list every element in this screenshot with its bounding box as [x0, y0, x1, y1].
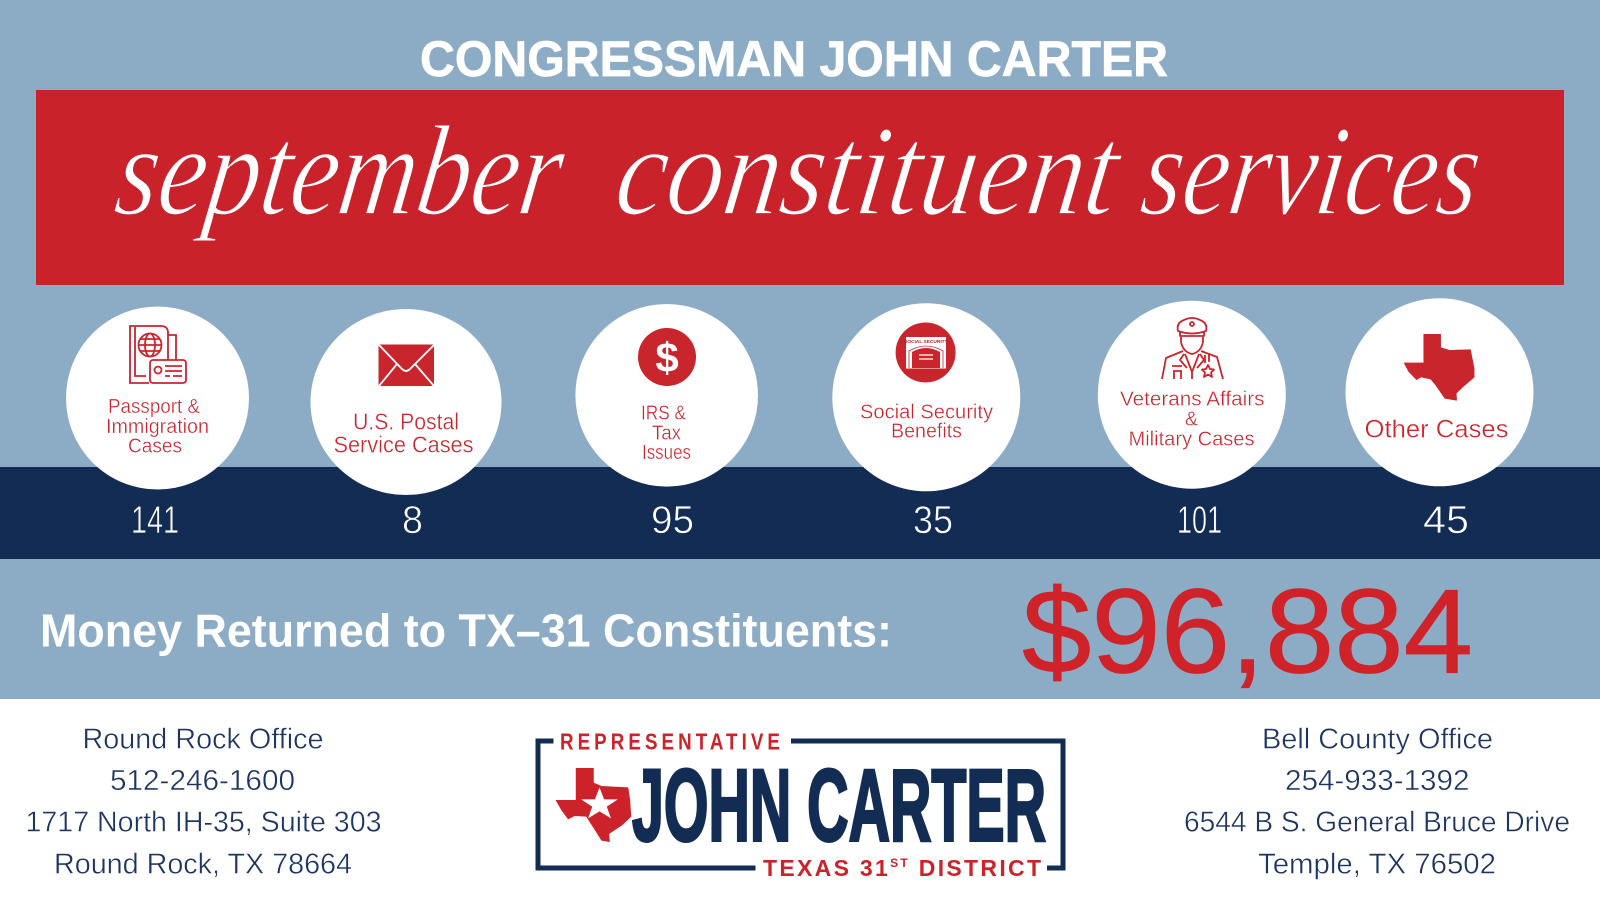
panel: passport and immigration: Immigration	[106, 416, 209, 438]
panel: IRS and tax: Issues	[642, 442, 691, 464]
round rock office	[26, 723, 382, 880]
banner: september constituent services: september	[108, 100, 574, 243]
logo name: JOHN CARTER	[632, 749, 1046, 863]
panel: IRS and tax	[575, 304, 758, 487]
panel: veterans and military: Military Cases	[1128, 429, 1254, 451]
navy band with case counts: 141	[131, 499, 179, 542]
icon: social security card: SOCIAL SECURITY	[904, 339, 949, 345]
bell county office: 6544 B S. General Bruce Drive	[1184, 807, 1570, 839]
panel: IRS and tax: Tax	[652, 422, 681, 444]
round rock office: Round Rock, TX 78664	[54, 848, 352, 880]
round rock office: 1717 North IH-35, Suite 303	[26, 807, 382, 839]
logo top line: REPRESENTATIVE	[560, 728, 784, 754]
navy band with case counts: 8	[402, 499, 423, 542]
navy band with case counts	[0, 467, 1600, 559]
icon: dollar coin	[638, 328, 696, 386]
icon: social security card	[896, 322, 956, 382]
logo bottom line: TEXAS 31	[763, 855, 888, 881]
logo bottom line: ST	[890, 856, 908, 870]
panel: social security	[832, 303, 1020, 491]
panel: social security: Social Security	[860, 401, 993, 423]
banner: september constituent services: services	[1134, 100, 1490, 243]
icon: texas	[1404, 334, 1474, 401]
icon: dollar coin: $	[655, 334, 679, 381]
panel: veterans and military	[1098, 301, 1286, 489]
panel: IRS and tax: IRS &	[641, 402, 687, 424]
logo texas star	[555, 768, 631, 842]
bell county office: Temple, TX 76502	[1258, 848, 1496, 880]
logo bottom line: DISTRICT	[910, 855, 1041, 881]
panel: other cases: Other Cases	[1364, 416, 1508, 444]
bell county office: 254-933-1392	[1285, 765, 1470, 797]
money returned amount: $96,884	[1022, 564, 1473, 698]
icon: envelope	[378, 344, 434, 386]
round rock office: 512-246-1600	[110, 765, 295, 797]
navy band with case counts: 45	[1423, 499, 1469, 542]
panel: postal service: U.S. Postal	[353, 408, 459, 434]
bell county office: Bell County Office	[1262, 723, 1493, 755]
panel: passport and immigration: Passport &	[108, 396, 201, 418]
panel: passport and immigration: Cases	[128, 436, 182, 458]
panel: social security: Benefits	[891, 421, 962, 443]
navy band with case counts: 95	[651, 499, 694, 542]
panel: postal service	[310, 309, 502, 495]
money returned label: Money Returned to TX–31 Constituents:	[40, 604, 892, 656]
logo frame	[538, 741, 1063, 868]
panel: veterans and military: Veterans Affairs	[1120, 389, 1264, 411]
icon: military officer	[1162, 318, 1223, 379]
round rock office: Round Rock Office	[82, 723, 324, 755]
navy band with case counts: 35	[913, 499, 953, 542]
bell county office	[1184, 723, 1570, 880]
panel: other cases	[1346, 298, 1534, 486]
icon: passport	[130, 326, 186, 383]
logo	[538, 728, 1063, 881]
navy band with case counts: 101	[1177, 499, 1222, 542]
banner: september constituent services: constituent	[608, 100, 1131, 243]
panel: passport and immigration	[66, 306, 249, 490]
panel: postal service: Service Cases	[334, 432, 474, 458]
footer panel	[0, 699, 1600, 900]
title: CONGRESSMAN JOHN CARTER	[420, 31, 1168, 87]
banner: september constituent services	[36, 90, 1564, 285]
panel: veterans and military: &	[1185, 409, 1199, 431]
